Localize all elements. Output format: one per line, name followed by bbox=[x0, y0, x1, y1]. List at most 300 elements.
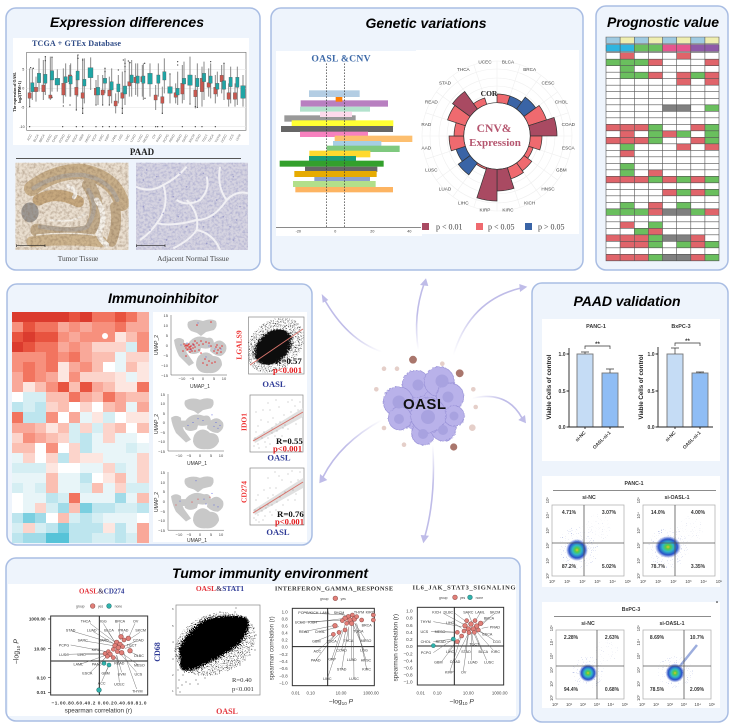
polar chart labels: AAD bbox=[422, 145, 432, 150]
umap: IDO1: −5 bbox=[187, 453, 192, 458]
boxplot: TCGA and GTEx expression: KICH bbox=[91, 133, 98, 142]
bubble plot: OASL and CD274: PRAD bbox=[118, 629, 129, 633]
bubble plot: interferon gamma response: 10.00 bbox=[336, 691, 347, 696]
boxplot: TCGA and GTEx expression: -5 bbox=[21, 106, 24, 110]
polar chart labels: LUAD bbox=[439, 186, 452, 191]
bubble plot: OASL and CD274: SARC bbox=[99, 638, 109, 642]
bubble plot: interferon gamma response: LAML bbox=[320, 611, 330, 615]
bubble plot: OASL and CD274: 10 bbox=[16, 645, 21, 651]
umap: IDO1: −5 bbox=[160, 430, 166, 435]
boxplot: TCGA and GTEx expression: UVM bbox=[235, 133, 242, 142]
flow cytometry: PANC-1: PANC-1 bbox=[625, 481, 644, 487]
bubble plot: interferon gamma response: yes bbox=[341, 597, 346, 601]
flow cytometry: BxPC-3: 8.69% bbox=[650, 635, 665, 641]
bubble plot: IL6 JAK STAT3 signaling: KIRC bbox=[491, 650, 500, 654]
stat: R value: R=0.57 bbox=[275, 356, 302, 366]
polar chart labels: HNSC bbox=[541, 186, 555, 191]
scatter: OASL and STAT1: OASL&STAT1 bbox=[196, 584, 244, 593]
flow cytometry: PANC-1: 3.35% bbox=[691, 564, 706, 570]
umap: IDO1: −10 bbox=[176, 453, 183, 458]
subheading: PAAD: PAAD bbox=[130, 147, 155, 157]
boxplot: TCGA and GTEx expression: SKCM bbox=[188, 133, 196, 143]
bubble plot: IL6 JAK STAT3 signaling: CHOL bbox=[421, 640, 431, 644]
bubble plot: IL6 JAK STAT3 signaling: yes bbox=[460, 596, 466, 600]
flow cytometry: PANC-1: si-OASL-1 bbox=[664, 495, 690, 501]
bubble plot: interferon gamma response: group bbox=[320, 597, 329, 601]
bubble plot: IL6 JAK STAT3 signaling: STAD bbox=[461, 650, 471, 654]
flow cytometry: PANC-1: 4.71% bbox=[562, 510, 577, 516]
legend: p values bbox=[422, 222, 565, 232]
flow cytometry: BxPC-3: 94.4% bbox=[564, 687, 579, 693]
bubble plot: interferon gamma response bbox=[270, 586, 393, 706]
stat: p value: p<0.001 bbox=[273, 365, 302, 375]
scatter: OASL and STAT1 bbox=[153, 584, 265, 716]
polar chart: CNV and expression: Expression bbox=[469, 137, 521, 149]
umap: CD274: UMAP_2 bbox=[154, 492, 160, 512]
bubble plot: OASL and CD274: UCS bbox=[134, 673, 143, 677]
bar chart: PANC-1 viability: 1.0 bbox=[559, 352, 566, 358]
boxplot: TCGA and GTEx expression: STAD bbox=[194, 133, 202, 143]
stat: R value: R=0.76 bbox=[277, 509, 304, 519]
bubble plot: interferon gamma response: PAAD bbox=[311, 659, 321, 663]
bubble plot: IL6 JAK STAT3 signaling: LIHC bbox=[446, 650, 455, 654]
bubble plot: OASL and CD274: MESO bbox=[134, 663, 145, 667]
panel: prognostic value bbox=[596, 6, 728, 270]
bubble plot: OASL and CD274: 10.00 bbox=[34, 646, 46, 651]
flow cytometry: PANC-1: si-NC bbox=[582, 495, 596, 501]
bubble plot: interferon gamma response: KICH bbox=[308, 621, 317, 625]
flow cytometry: BxPC-3: BxPC-3 bbox=[622, 607, 640, 613]
polar chart: CNV and expression: CNV& bbox=[477, 122, 512, 135]
umap: IDO1: 10 bbox=[161, 401, 166, 406]
stat: p value: p<0.001 bbox=[273, 444, 302, 454]
umap: LGALS9: −15 bbox=[161, 373, 169, 378]
bubble plot: interferon gamma response: 0.4 bbox=[282, 631, 288, 636]
boxplot: TCGA and GTEx expression: -10 bbox=[19, 125, 25, 129]
boxplot: TCGA and GTEx expression: COAD bbox=[58, 133, 66, 143]
bubble plot: interferon gamma response: LIHC bbox=[323, 677, 332, 681]
bubble plot: IL6 JAK STAT3 signaling: KICH bbox=[432, 611, 441, 615]
flow cytometry: BxPC-3: 78.5% bbox=[650, 687, 665, 693]
bubble plot: interferon gamma response: KIRP bbox=[327, 658, 336, 662]
bubble plot: IL6 JAK STAT3 signaling: 0.6 bbox=[406, 623, 413, 628]
bubble plot: OASL and CD274: UCEC bbox=[114, 683, 125, 687]
boxplot: TCGA and GTEx expression: OV bbox=[151, 133, 157, 139]
polar chart labels: GBM bbox=[556, 168, 567, 173]
bubble plot: interferon gamma response: LGG bbox=[360, 648, 368, 652]
bubble plot: interferon gamma response: ACC bbox=[313, 649, 322, 653]
bubble plot: IL6 JAK STAT3 signaling: 0.0 bbox=[406, 644, 413, 649]
label: IDO1: IDO1 bbox=[240, 413, 248, 431]
umap: CD274: 5 bbox=[163, 489, 166, 494]
polar chart labels: RAD bbox=[421, 122, 432, 127]
umap: CD274: −5 bbox=[187, 532, 192, 537]
bubble plot: IL6 JAK STAT3 signaling: LIHC bbox=[446, 621, 455, 625]
bubble plot: interferon gamma response: KIRC bbox=[366, 611, 375, 615]
umap: IDO1: 5 bbox=[163, 411, 166, 416]
bubble plot: IL6 JAK STAT3 signaling: −0.2 bbox=[403, 651, 413, 656]
bubble plot: interferon gamma response: −0.4 bbox=[279, 659, 288, 664]
polar chart labels: LIHC bbox=[458, 200, 469, 205]
boxplot: TCGA and GTEx expression: BLCA bbox=[32, 133, 40, 143]
umap: LGALS9: −10 bbox=[161, 363, 169, 368]
flow cytometry: BxPC-3: 0.68% bbox=[605, 687, 620, 693]
bubble plot: OASL and CD274: spearman correlation (r) bbox=[65, 708, 132, 715]
flow cytometry: PANC-1: 87.2% bbox=[562, 564, 577, 570]
bubble plot: OASL and CD274: yes bbox=[98, 605, 104, 609]
bubble plot: OASL and CD274: OV bbox=[133, 619, 139, 623]
polar chart labels: KIRP bbox=[480, 207, 490, 212]
scatter: CD274 vs OASL bbox=[240, 468, 304, 537]
bubble plot: interferon gamma response: GBM bbox=[312, 639, 321, 643]
heading: expression differences: Expression differences bbox=[50, 14, 204, 30]
stat: p value: p<0.001 bbox=[275, 516, 304, 526]
flow cytometry: PANC-1: 10⁰ 10¹ 10² 10³ 10⁴ 10⁵ bbox=[549, 579, 631, 584]
bubble plot: OASL and CD274: STAD bbox=[66, 628, 76, 632]
flow cytometry: PANC-1: 78.7% bbox=[651, 564, 666, 570]
polar chart labels bbox=[421, 60, 576, 212]
umap: CD274: −10 bbox=[176, 532, 183, 537]
label: CD274: CD274 bbox=[240, 481, 248, 503]
bubble plot: OASL and CD274 bbox=[14, 587, 148, 715]
bubble plot: interferon gamma response: 0.0 bbox=[282, 645, 288, 650]
umap: CD274: 15 bbox=[161, 470, 166, 475]
bubble plot: OASL and CD274: −1.00.80.60.40.2 0.00.20.40.60.81.0 bbox=[51, 701, 147, 706]
panel: PAAD validation bbox=[532, 283, 728, 722]
polar chart labels: COAD bbox=[562, 122, 576, 127]
legend: p values: p < 0.01 bbox=[436, 222, 463, 232]
polar chart labels: LUSC bbox=[425, 168, 438, 173]
bubble plot: interferon gamma response: TGCA bbox=[353, 629, 364, 633]
umap: LGALS9: 10 bbox=[164, 323, 169, 328]
umap: LGALS9: −10 bbox=[179, 376, 186, 381]
umap: LGALS9: −5 bbox=[163, 353, 169, 358]
caption: tumor tissue: Tumor Tissue bbox=[58, 254, 99, 263]
bubble plot: interferon gamma response: PCPG/KICH bbox=[298, 611, 319, 615]
umap: IDO1: 0 bbox=[163, 420, 166, 425]
boxplot: TCGA and GTEx expression: UCS bbox=[228, 134, 235, 141]
axis label: OASL: OASL bbox=[262, 379, 286, 389]
bubble plot: IL6 JAK STAT3 signaling: −0.4 bbox=[403, 658, 413, 663]
flow cytometry: BxPC-3: 10⁰ 10¹ 10² 10³ 10⁴ 10⁵ bbox=[636, 625, 641, 701]
umap: IDO1: −10 bbox=[158, 439, 166, 444]
bar chart: BxPC-3 viability: BxPC-3 bbox=[671, 324, 691, 330]
bubble plot: IL6 JAK STAT3 signaling: OV bbox=[461, 671, 467, 675]
bubble plot: IL6 JAK STAT3 signaling: 0.8 bbox=[406, 616, 413, 621]
boxplot: TCGA and GTEx expression: GBM bbox=[78, 133, 85, 142]
bubble plot: IL6 JAK STAT3 signaling: 1.0 bbox=[406, 609, 413, 614]
bubble plot: interferon gamma response: −0.6 bbox=[279, 666, 288, 671]
flow cytometry: BxPC-3 bbox=[542, 601, 720, 708]
polar chart labels: CESC bbox=[542, 81, 555, 86]
umap: CD274: −5 bbox=[160, 509, 166, 514]
flow cytometry: PANC-1 bbox=[542, 476, 722, 587]
bubble plot: interferon gamma response: 0.6 bbox=[282, 624, 288, 629]
bar chart: OASL and CNV: 20 bbox=[370, 229, 374, 233]
bubble plot: IL6 JAK STAT3 signaling: DLBC bbox=[443, 611, 454, 615]
stat: R value: R=0.55 bbox=[276, 436, 303, 446]
bubble plot: IL6 JAK STAT3 signaling: −1.0 bbox=[403, 679, 413, 684]
bubble plot: OASL and CD274: SARC bbox=[78, 638, 88, 642]
panel: tumor immunity environment bbox=[6, 558, 520, 721]
bubble plot: interferon gamma response: P bbox=[347, 699, 354, 706]
bubble plot: IL6 JAK STAT3 signaling: 0.4 bbox=[406, 630, 413, 635]
bar chart: PANC-1 viability: OASL-si-1 bbox=[592, 430, 613, 451]
bubble plot: interferon gamma response: LUAD bbox=[347, 658, 357, 662]
umap: CD274: UMAP_1 bbox=[187, 538, 207, 544]
bubble plot: interferon gamma response: spearman correlation (r) bbox=[270, 616, 276, 680]
boxplot: TCGA and GTEx expression: PAAD bbox=[155, 133, 163, 143]
boxplot: TCGA and GTEx expression: PRAD bbox=[168, 133, 176, 143]
bubble plot: IL6 JAK STAT3 signaling: 10.00 bbox=[463, 691, 474, 696]
polar chart labels: BRCA bbox=[523, 67, 537, 72]
bubble plot: OASL and CD274: COAD bbox=[133, 638, 144, 642]
bubble plot: interferon gamma response: INTERFERON_GAMMA_RESPONSE bbox=[275, 586, 393, 593]
umap: CD274 bbox=[154, 470, 224, 544]
scatter: OASL and STAT1: 5 bbox=[172, 624, 174, 628]
bubble plot: IL6 JAK STAT3 signaling: 10 bbox=[462, 701, 468, 706]
bubble plot: IL6 JAK STAT3 signaling: GBM bbox=[434, 661, 443, 665]
bubble plot: IL6 JAK STAT3 signaling: LAML bbox=[475, 611, 485, 615]
boxplot: TCGA and GTEx expression: LGG bbox=[117, 133, 124, 141]
polar chart labels: BLCA bbox=[502, 60, 515, 65]
flow cytometry: PANC-1: 10⁰ 10¹ 10² 10³ 10⁴ 10⁵ bbox=[545, 497, 550, 579]
bubble plot: interferon gamma response: COAD bbox=[336, 648, 347, 652]
bubble plot: OASL and CD274: ESCA bbox=[82, 672, 93, 676]
bubble plot: IL6 JAK STAT3 signaling: LUAD bbox=[468, 661, 478, 665]
umap: LGALS9 bbox=[154, 313, 227, 390]
umap: CD274: −15 bbox=[158, 528, 166, 533]
bubble plot: IL6 JAK STAT3 signaling: LUSC bbox=[484, 661, 494, 665]
umap: CD274: 10 bbox=[219, 532, 224, 537]
umap: IDO1: UMAP_2 bbox=[154, 414, 160, 434]
bubble plot: OASL and CD274: −log bbox=[14, 651, 21, 664]
scatter: OASL and STAT1: 3 bbox=[172, 657, 174, 661]
bubble plot: interferon gamma response: −1.0 bbox=[279, 680, 288, 685]
bar chart: OASL and CNV: OASL &CNV bbox=[311, 54, 371, 65]
umap: CD274: 0 bbox=[199, 532, 202, 537]
bar chart: PANC-1 viability: 0.0 bbox=[559, 425, 566, 431]
flow cytometry: BxPC-3: si-OASL-1 bbox=[659, 621, 685, 627]
polar chart labels: UCEC bbox=[478, 60, 492, 65]
bubble plot: interferon gamma response: 0.01 bbox=[291, 691, 300, 696]
bubble plot: IL6 JAK STAT3 signaling: none bbox=[476, 596, 483, 600]
legend: p values: p < 0.05 bbox=[488, 222, 515, 232]
bubble plot: OASL and CD274: SKCM bbox=[135, 629, 146, 633]
umap: IDO1: 5 bbox=[210, 453, 213, 458]
umap: IDO1: 15 bbox=[161, 392, 166, 397]
bar chart: BxPC-3 viability: OASL-si-1 bbox=[682, 430, 703, 451]
bubble plot: IL6 JAK STAT3 signaling: BRCA bbox=[484, 617, 495, 621]
bubble plot: interferon gamma response: 0.10 bbox=[306, 691, 315, 696]
scatter: IDO1 vs OASL bbox=[240, 395, 303, 462]
bubble plot: OASL and CD274: none bbox=[115, 605, 122, 609]
bubble plot: interferon gamma response: 0.2 bbox=[282, 638, 288, 643]
panel: expression differences bbox=[6, 8, 260, 270]
bubble plot: interferon gamma response: LUSC bbox=[349, 677, 359, 681]
bubble plot: IL6 JAK STAT3 signaling: PRAD bbox=[490, 625, 500, 629]
boxplot: TCGA and GTEx expression: BRCA bbox=[38, 133, 46, 143]
bubble plot: interferon gamma response: −0.8 bbox=[279, 673, 288, 678]
bubble plot: interferon gamma response: READ bbox=[299, 630, 309, 634]
bubble plot: interferon gamma response: ESCA bbox=[327, 639, 337, 643]
umap: CD274: 5 bbox=[210, 532, 213, 537]
axis label: OASL: OASL bbox=[266, 527, 290, 537]
bubble plot: OASL and CD274: 0.01 bbox=[37, 690, 46, 695]
bubble plot: interferon gamma response: −0.2 bbox=[279, 652, 288, 657]
flow cytometry: PANC-1: 4.00% bbox=[691, 510, 706, 516]
boxplot: TCGA and GTEx expression: SARC bbox=[181, 133, 189, 143]
arrows from centre bbox=[319, 278, 527, 543]
bubble plot: OASL and CD274: READ bbox=[114, 662, 125, 666]
heading: prognostic value: Prognostic value bbox=[607, 14, 719, 30]
umap: IDO1: 10 bbox=[219, 453, 224, 458]
image: tumor tissue bbox=[15, 163, 129, 250]
bar chart: PANC-1 viability: ** bbox=[595, 342, 600, 348]
boxplot: TCGA and GTEx expression: MESO bbox=[142, 133, 150, 144]
scatter: OASL and STAT1: 2 bbox=[172, 673, 174, 677]
boxplot: TCGA and GTEx expression: CHOL bbox=[51, 133, 59, 143]
umap: IDO1 bbox=[154, 392, 224, 467]
polar chart: CNV and expression bbox=[422, 61, 572, 211]
bubble plot: interferon gamma response: KIRC bbox=[362, 667, 371, 671]
polar chart labels: KIRC bbox=[502, 207, 514, 212]
heading: tumor immunity environment: Tumor immunity environment bbox=[172, 565, 369, 581]
boxplot: TCGA and GTEx expression: KIRP bbox=[104, 134, 111, 142]
icon: tumor cell cluster with OASL label: OASL bbox=[403, 396, 446, 413]
scatter: LGALS9 vs OASL bbox=[236, 316, 304, 387]
image: adjacent normal tissue bbox=[136, 163, 248, 250]
boxplot: TCGA and GTEx expression: TGCT bbox=[201, 133, 209, 143]
boxplot: TCGA and GTEx expression: 5 bbox=[22, 68, 24, 72]
bubble plot: interferon gamma response: −log bbox=[329, 699, 342, 706]
bubble plot: OASL and CD274: BRCA bbox=[115, 619, 126, 623]
flow cytometry: PANC-1: 5.02% bbox=[602, 564, 617, 570]
polar chart labels: READ bbox=[425, 100, 438, 105]
bubble plot: interferon gamma response: 1000.00 bbox=[363, 691, 379, 696]
boxplot: TCGA and GTEx expression: TCGA + GTEx Database bbox=[32, 39, 121, 48]
umap: LGALS9: UMAP_2 bbox=[154, 335, 160, 355]
legend: p values: p > 0.05 bbox=[538, 222, 565, 232]
bubble plot: OASL and CD274: PAAD bbox=[92, 662, 102, 666]
polar chart labels: THCA bbox=[457, 67, 471, 72]
polar chart: CNV and expression: COR bbox=[481, 89, 498, 98]
umap: LGALS9: 5 bbox=[166, 333, 169, 338]
bubble plot: IL6 JAK STAT3 signaling: THYM bbox=[420, 620, 431, 624]
scatter: OASL and STAT1: 1 bbox=[172, 689, 174, 693]
bar chart: BxPC-3 viability: 0.5 bbox=[648, 389, 655, 395]
bubble plot: interferon gamma response: UCEC bbox=[295, 621, 306, 625]
flow cytometry: BxPC-3: si-NC bbox=[581, 621, 595, 627]
panel: immunoinhibitor bbox=[7, 284, 315, 545]
boxplot: TCGA and GTEx expression: LIHC bbox=[124, 133, 131, 142]
flow cytometry: BxPC-3: 2.28% bbox=[564, 635, 579, 641]
bubble plot: IL6 JAK STAT3 signaling: COAD bbox=[450, 660, 461, 664]
bubble plot: interferon gamma response: CHOL bbox=[315, 630, 325, 634]
label: CD68: CD68 bbox=[153, 642, 162, 662]
bar chart: BxPC-3 viability: Viable Cells of control bbox=[638, 354, 645, 419]
bubble plot: interferon gamma response: THCA bbox=[343, 639, 354, 643]
bubble plot: IL6 JAK STAT3 signaling: −0.6 bbox=[403, 665, 413, 670]
bubble plot: interferon gamma response: STAD bbox=[337, 668, 347, 672]
polar chart labels: ESCA bbox=[562, 145, 576, 150]
bar chart: BxPC-3 viability: si-NC bbox=[664, 430, 678, 443]
bar chart: PANC-1 viability: Viable Cells of control bbox=[546, 354, 553, 419]
bar chart: BxPC-3 viability: 0.0 bbox=[648, 425, 655, 431]
bar chart: PANC-1 viability bbox=[546, 324, 624, 451]
flow cytometry: BxPC-3: 10⁰ 10¹ 10² 10³ 10⁴ 10⁵ bbox=[549, 625, 554, 701]
bubble plot: IL6 JAK STAT3 signaling: P bbox=[468, 699, 474, 706]
panel: genetic variations bbox=[271, 8, 583, 270]
umap: LGALS9: 5 bbox=[213, 376, 216, 381]
bubble plot: OASL and CD274: LUSC bbox=[59, 653, 69, 657]
bubble plot: IL6 JAK STAT3 signaling: −log bbox=[450, 699, 462, 706]
bar chart: OASL and CNV bbox=[276, 54, 421, 233]
bubble plot: interferon gamma response: SKCM bbox=[334, 611, 344, 615]
bubble plot: OASL and CD274: THYM bbox=[132, 689, 143, 693]
bar chart: PANC-1 viability: 0.5 bbox=[559, 389, 566, 395]
boxplot: TCGA and GTEx expression: HNSC bbox=[84, 133, 92, 143]
heading: PAAD validation: PAAD validation bbox=[574, 293, 680, 309]
bar chart: PANC-1 viability: si-NC bbox=[574, 430, 588, 443]
bubble plot: OASL and CD274: GBM bbox=[101, 672, 110, 676]
boxplot: TCGA and GTEx expression: UCEC bbox=[220, 133, 228, 143]
bubble plot: interferon gamma response: 1.0 bbox=[282, 609, 288, 614]
bar chart: BxPC-3 viability bbox=[638, 324, 713, 451]
bar chart: PANC-1 viability: PANC-1 bbox=[586, 324, 606, 330]
flow cytometry: PANC-1: 14.0% bbox=[651, 510, 666, 516]
bubble plot: OASL and CD274: ACC bbox=[98, 682, 106, 686]
flow cytometry: BxPC-3: 2.09% bbox=[690, 687, 705, 693]
flow cytometry: BxPC-3: 10⁰ 10¹ 10² 10³ 10⁴ 10⁵ bbox=[639, 702, 715, 707]
boxplot: TCGA and GTEx expression: DLBC bbox=[64, 133, 72, 143]
umap: LGALS9: UMAP_1 bbox=[190, 384, 210, 390]
bubble plot: OASL and CD274: P bbox=[14, 639, 21, 646]
scatter: OASL and STAT1: 4 bbox=[172, 640, 174, 644]
bubble plot: IL6 JAK STAT3 signaling: TGCT bbox=[469, 643, 480, 647]
bubble plot: IL6 JAK STAT3 signaling: −0.8 bbox=[403, 672, 413, 677]
bubble plot: interferon gamma response: THYM bbox=[354, 611, 364, 615]
umap: LGALS9: −5 bbox=[190, 376, 195, 381]
bubble plot: OASL and CD274: group bbox=[76, 605, 85, 609]
boxplot: TCGA and GTEx expression: KIRC bbox=[98, 133, 105, 142]
flow cytometry: BxPC-3: 10.7% bbox=[690, 635, 705, 641]
boxplot: TCGA and GTEx expression: LAML bbox=[110, 133, 118, 143]
bubble plot: IL6 JAK STAT3 signaling: ESCA bbox=[482, 633, 493, 637]
bubble plot: IL6 JAK STAT3 signaling: PCPG bbox=[421, 651, 431, 655]
bubble plot: IL6 JAK STAT3 signaling: SKCM bbox=[490, 611, 500, 615]
umap: CD274: 0 bbox=[163, 499, 166, 504]
flow cytometry: PANC-1: 10⁰ 10¹ 10² 10³ 10⁴ 10⁵ bbox=[636, 497, 641, 579]
heatmap: immunoinhibitor correlations bbox=[12, 312, 149, 543]
bubble plot: OASL and CD274: UVM bbox=[118, 673, 126, 677]
bubble plot: IL6 JAK STAT3 signaling: spearman correlation (r) bbox=[392, 614, 399, 681]
bubble plot: OASL and CD274: PCPG bbox=[59, 643, 69, 647]
bubble plot: OASL and CD274: 0.10 bbox=[37, 675, 46, 680]
bubble plot: IL6 JAK STAT3 signaling: 0.01 bbox=[416, 691, 425, 696]
bubble plot: OASL and CD274: KIRC bbox=[92, 648, 101, 652]
boxplot: TCGA and GTEx expression: THYM bbox=[214, 133, 222, 143]
umap: IDO1: 0 bbox=[199, 453, 202, 458]
scatter: OASL and STAT1: 6 bbox=[172, 607, 174, 611]
bubble plot: IL6 JAK STAT3 signaling: 1000.00 bbox=[492, 691, 508, 696]
bubble plot: OASL and CD274: TGCT bbox=[127, 644, 137, 648]
boxplot: TCGA and GTEx expression: READ bbox=[175, 133, 183, 143]
boxplot: TCGA and GTEx expression bbox=[13, 38, 249, 145]
bubble plot: OASL and CD274: THCA bbox=[81, 619, 91, 623]
bubble plot: IL6 JAK STAT3 signaling: IL6_JAK_STAT3_SIGNALING bbox=[412, 585, 515, 592]
flow cytometry: BxPC-3: 10⁰ 10¹ 10² 10³ 10⁴ 10⁵ bbox=[552, 702, 628, 707]
